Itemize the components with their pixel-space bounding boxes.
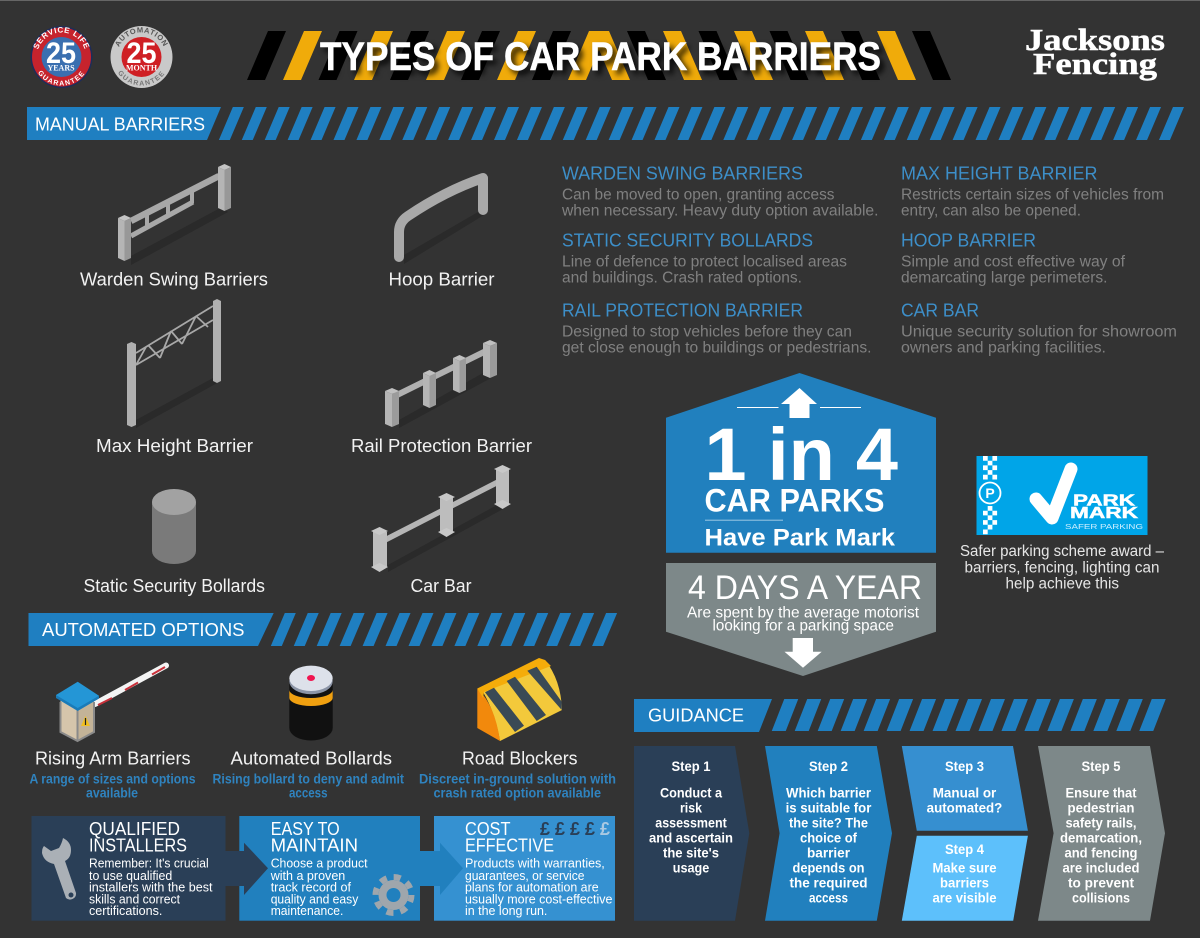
step 3: [902, 746, 1028, 831]
panel: easy to maintain: track record of: [271, 880, 351, 895]
panel: qualified installers: certifications.: [89, 903, 162, 918]
badge: service life guarantee: 25: [46, 37, 76, 70]
text block: barrier descriptions right column: CAR BAR: [901, 300, 979, 321]
step 5: collisions: [1072, 890, 1130, 905]
panel: easy to maintain: Choose a product: [271, 856, 368, 871]
step 3: Manual or: [933, 785, 997, 800]
step 1: risk: [680, 800, 702, 815]
stat panel: 4 days a year: Are spent by the average motorist: [687, 604, 920, 621]
label: static security bollards: Static Security Bollards: [84, 575, 265, 596]
panel: easy to maintain: MAINTAIN: [271, 836, 358, 856]
icon: automated bollard: [289, 666, 333, 740]
arrow: installers to maintain: [225, 843, 268, 895]
badge: service life guarantee: GUARANTEE: [38, 70, 84, 86]
illustration: hoop barrier: [399, 178, 484, 264]
panel: cost effective: Products with warranties,: [465, 856, 605, 871]
panel: qualified installers: QUALIFIED: [89, 819, 180, 839]
icon: checkered strip: [983, 456, 997, 534]
icon: pound signs: £: [540, 819, 550, 839]
caption: safer parking scheme: Safer parking scheme award –: [960, 543, 1164, 560]
text block: barrier descriptions left column: when necessary. Heavy duty option available.: [561, 203, 878, 220]
section heading: guidance: [634, 699, 1160, 732]
icon: road blocker: [477, 658, 562, 741]
panel: cost effective: EFFECTIVE: [465, 836, 554, 856]
text block: barrier descriptions right column: Restricts certain sizes of vehicles from: [901, 186, 1164, 203]
badge: automation guarantee: MONTH: [126, 64, 158, 72]
panel: qualified installers: Remember: It's crucial: [89, 856, 209, 871]
description: road blockers: crash rated option available: [434, 785, 601, 800]
label: max height barrier: Max Height Barrier: [96, 435, 253, 456]
text block: barrier descriptions left column: get close enough to buildings or pedestrians.: [562, 340, 872, 356]
label: road blockers: Road Blockers: [462, 747, 578, 768]
label: automated bollards: Automated Bollards: [230, 747, 392, 768]
illustration: car bar: [371, 465, 511, 572]
step 5: safety rails,: [1066, 815, 1136, 830]
stat panel: 1 in 4 car parks: Have Park Mark: [704, 525, 896, 552]
illustration: static security bollard: [152, 489, 196, 564]
description: rising arm barriers: available: [86, 785, 138, 800]
text block: barrier descriptions right column: demarcating large perimeters.: [901, 270, 1108, 287]
badge: automation guarantee: GUARANTEE: [118, 70, 164, 86]
text block: barrier descriptions left column: and buildings. Crash rated options.: [562, 270, 802, 287]
stat panel: 1 in 4 car parks: 1 in 4: [704, 413, 898, 496]
section heading: manual barriers: MANUAL BARRIERS: [35, 114, 205, 134]
step 1: Conduct a: [660, 785, 722, 800]
panel: cost effective: [434, 816, 615, 921]
description: rising arm barriers: A range of sizes and options: [30, 771, 196, 786]
panel: easy to maintain: maintenance.: [271, 903, 343, 918]
text block: barrier descriptions right column: [901, 162, 1177, 356]
caption: safer parking scheme: [960, 543, 1164, 592]
description: road blockers: Discreet in-ground solution with: [419, 771, 616, 786]
step 1: [634, 746, 749, 921]
text block: barrier descriptions right column: Unique security solution for showroom: [901, 324, 1177, 341]
text block: barrier descriptions right column: HOOP BARRIER: [901, 230, 1036, 251]
text block: barrier descriptions right column: Simple and cost effective way of: [901, 254, 1126, 271]
stat panel: 1 in 4 car parks: CAR PARKS: [704, 483, 884, 519]
icon: wrench: [42, 838, 76, 900]
panel: automated options: [30, 658, 616, 800]
logo: Park Mark safer parking: MARK: [1070, 505, 1139, 522]
step 2: access: [809, 890, 848, 905]
step 1: usage: [673, 860, 710, 875]
description: rising arm barriers: [30, 771, 196, 800]
icon: down arrow: [784, 638, 822, 668]
step 4: Step 4: [945, 842, 984, 857]
icon: up arrow: [781, 388, 817, 418]
step 2: choice of: [800, 830, 857, 845]
arrow: maintain to cost effective: [420, 843, 463, 895]
text block: barrier descriptions left column: [561, 162, 878, 356]
panel: cost effective: usually more cost-effective: [465, 891, 612, 906]
panel: qualified installers: to use qualified: [89, 868, 172, 883]
label: rail protection barrier: Rail Protection Barrier: [351, 435, 532, 456]
step 3: Step 3: [945, 759, 984, 774]
icon: rising arm barrier: [56, 666, 166, 741]
step 1: the site's: [663, 845, 719, 860]
panel: cost effective: COST: [465, 819, 510, 839]
label: hoop barrier: Hoop Barrier: [388, 268, 494, 290]
step 2: Which barrier: [786, 785, 872, 800]
illustration: max height barrier: [127, 299, 221, 428]
icon: pound signs: £: [555, 819, 565, 839]
step 5: pedestrian: [1068, 800, 1134, 815]
step 5: Step 5: [1082, 759, 1121, 774]
title banner with hazard stripes: TYPES OF CAR PARK BARRIERS: [320, 35, 881, 79]
stat panel: 4 days a year: 4 DAYS A YEAR: [688, 569, 922, 607]
text block: barrier descriptions right column: MAX HEIGHT BARRIER: [901, 162, 1098, 183]
description: automated bollards: Rising bollard to deny and admit: [212, 771, 404, 786]
text block: barrier descriptions right column: entry, can also be opened.: [901, 203, 1081, 220]
badge: service life guarantee: YEARS: [47, 64, 75, 72]
logo: Jacksons Fencing: [1025, 22, 1165, 81]
logo: Jacksons Fencing: Jacksons: [1025, 22, 1165, 57]
logo: Jacksons Fencing: Fencing: [1033, 46, 1158, 81]
panel: cost effective: guarantees, or service: [465, 868, 584, 883]
panel: qualified installers: skills and correct: [89, 891, 180, 906]
text block: barrier descriptions left column: WARDEN SWING BARRIERS: [562, 162, 803, 183]
section heading: guidance: GUIDANCE: [648, 705, 744, 726]
step 5: [1038, 746, 1165, 921]
section heading: automated options: [28, 613, 610, 646]
step 2: the required: [790, 875, 868, 890]
icon: check mark: [1036, 469, 1071, 518]
step 4: Make sure: [932, 861, 997, 876]
badge: service life guarantee: SERVICE LIFE: [34, 27, 90, 49]
step 3: automated?: [927, 800, 1002, 815]
panel: manual barrier illustrations: [80, 164, 532, 596]
logo: Park Mark safer parking: PARK: [1073, 492, 1136, 510]
step 2: depends on: [792, 860, 864, 875]
panel: easy to maintain: EASY TO: [271, 819, 340, 839]
badge: service life guarantee: [30, 26, 92, 88]
step 2: [765, 746, 892, 921]
icon: pound signs: £: [585, 819, 595, 839]
icon: pound signs: [540, 819, 610, 839]
badge: automation guarantee: 25: [126, 37, 156, 70]
stat panel: 1 in 4 car parks: [666, 373, 936, 553]
step 1: assessment: [655, 815, 727, 830]
step 4: are visible: [932, 891, 997, 906]
description: automated bollards: access: [289, 785, 328, 800]
step 1: Step 1: [672, 759, 711, 774]
text block: barrier descriptions right column: owners and parking facilities.: [901, 340, 1106, 356]
step 5: demarcation,: [1060, 830, 1142, 845]
step 5: Ensure that: [1066, 785, 1137, 800]
illustration: warden swing barrier: [118, 164, 231, 265]
logo: Park Mark safer parking: [976, 456, 1148, 535]
caption: safer parking scheme: help achieve this: [1006, 575, 1119, 592]
step 5: and fencing: [1064, 845, 1138, 860]
step 5: are included: [1062, 860, 1140, 875]
caption: safer parking scheme: barriers, fencing, lighting can: [964, 559, 1160, 576]
step 5: to prevent: [1068, 875, 1135, 890]
step 2: Step 2: [809, 759, 848, 774]
panel: easy to maintain: with a proven: [270, 868, 345, 883]
label: rising arm barriers: Rising Arm Barriers: [35, 747, 190, 768]
icon: pound signs: £: [600, 819, 610, 839]
label: warden swing barriers: Warden Swing Barriers: [80, 268, 268, 290]
badge: automation guarantee: AUTOMATION: [116, 27, 168, 47]
step 2: is suitable for: [786, 800, 872, 815]
step 2: the site? The: [789, 815, 868, 830]
panel: easy to maintain: quality and easy: [271, 891, 359, 906]
icon: gear: [376, 877, 412, 913]
step 4: [902, 836, 1028, 921]
text block: barrier descriptions left column: STATIC SECURITY BOLLARDS: [562, 230, 813, 251]
logo: Park Mark safer parking: SAFER PARKING: [1065, 522, 1143, 531]
text block: barrier descriptions left column: Can be moved to open, granting access: [562, 186, 835, 203]
step 1: and ascertain: [649, 830, 733, 845]
panel: qualified installers: INSTALLERS: [89, 836, 187, 856]
text block: barrier descriptions left column: RAIL PROTECTION BARRIER: [562, 300, 803, 321]
text block: barrier descriptions left column: Line of defence to protect localised areas: [562, 254, 847, 271]
section heading: manual barriers: [27, 107, 1177, 140]
logo: Park Mark safer parking: P: [985, 485, 995, 501]
stat panel: 4 days a year: [666, 563, 936, 676]
panel: qualified installers: installers with the best: [89, 880, 213, 895]
panel: cost effective: plans for automation are: [465, 880, 599, 895]
stat panel: 4 days a year: looking for a parking space: [712, 618, 894, 635]
description: automated bollards: [212, 771, 404, 800]
description: road blockers: [419, 771, 616, 800]
panel: cost effective: in the long run.: [465, 903, 547, 918]
section heading: automated options: AUTOMATED OPTIONS: [42, 619, 244, 640]
icon: pound signs: £: [570, 819, 580, 839]
step 4: barriers: [940, 876, 989, 891]
panel: qualified installers: [32, 816, 268, 921]
badge: automation guarantee: [110, 26, 172, 88]
step 2: barrier: [807, 845, 851, 860]
label: car bar: Car Bar: [410, 575, 472, 596]
panel: easy to maintain: [239, 816, 463, 921]
illustration: rail protection barrier: [385, 340, 497, 428]
text block: barrier descriptions left column: Designed to stop vehicles before they can: [562, 324, 852, 341]
